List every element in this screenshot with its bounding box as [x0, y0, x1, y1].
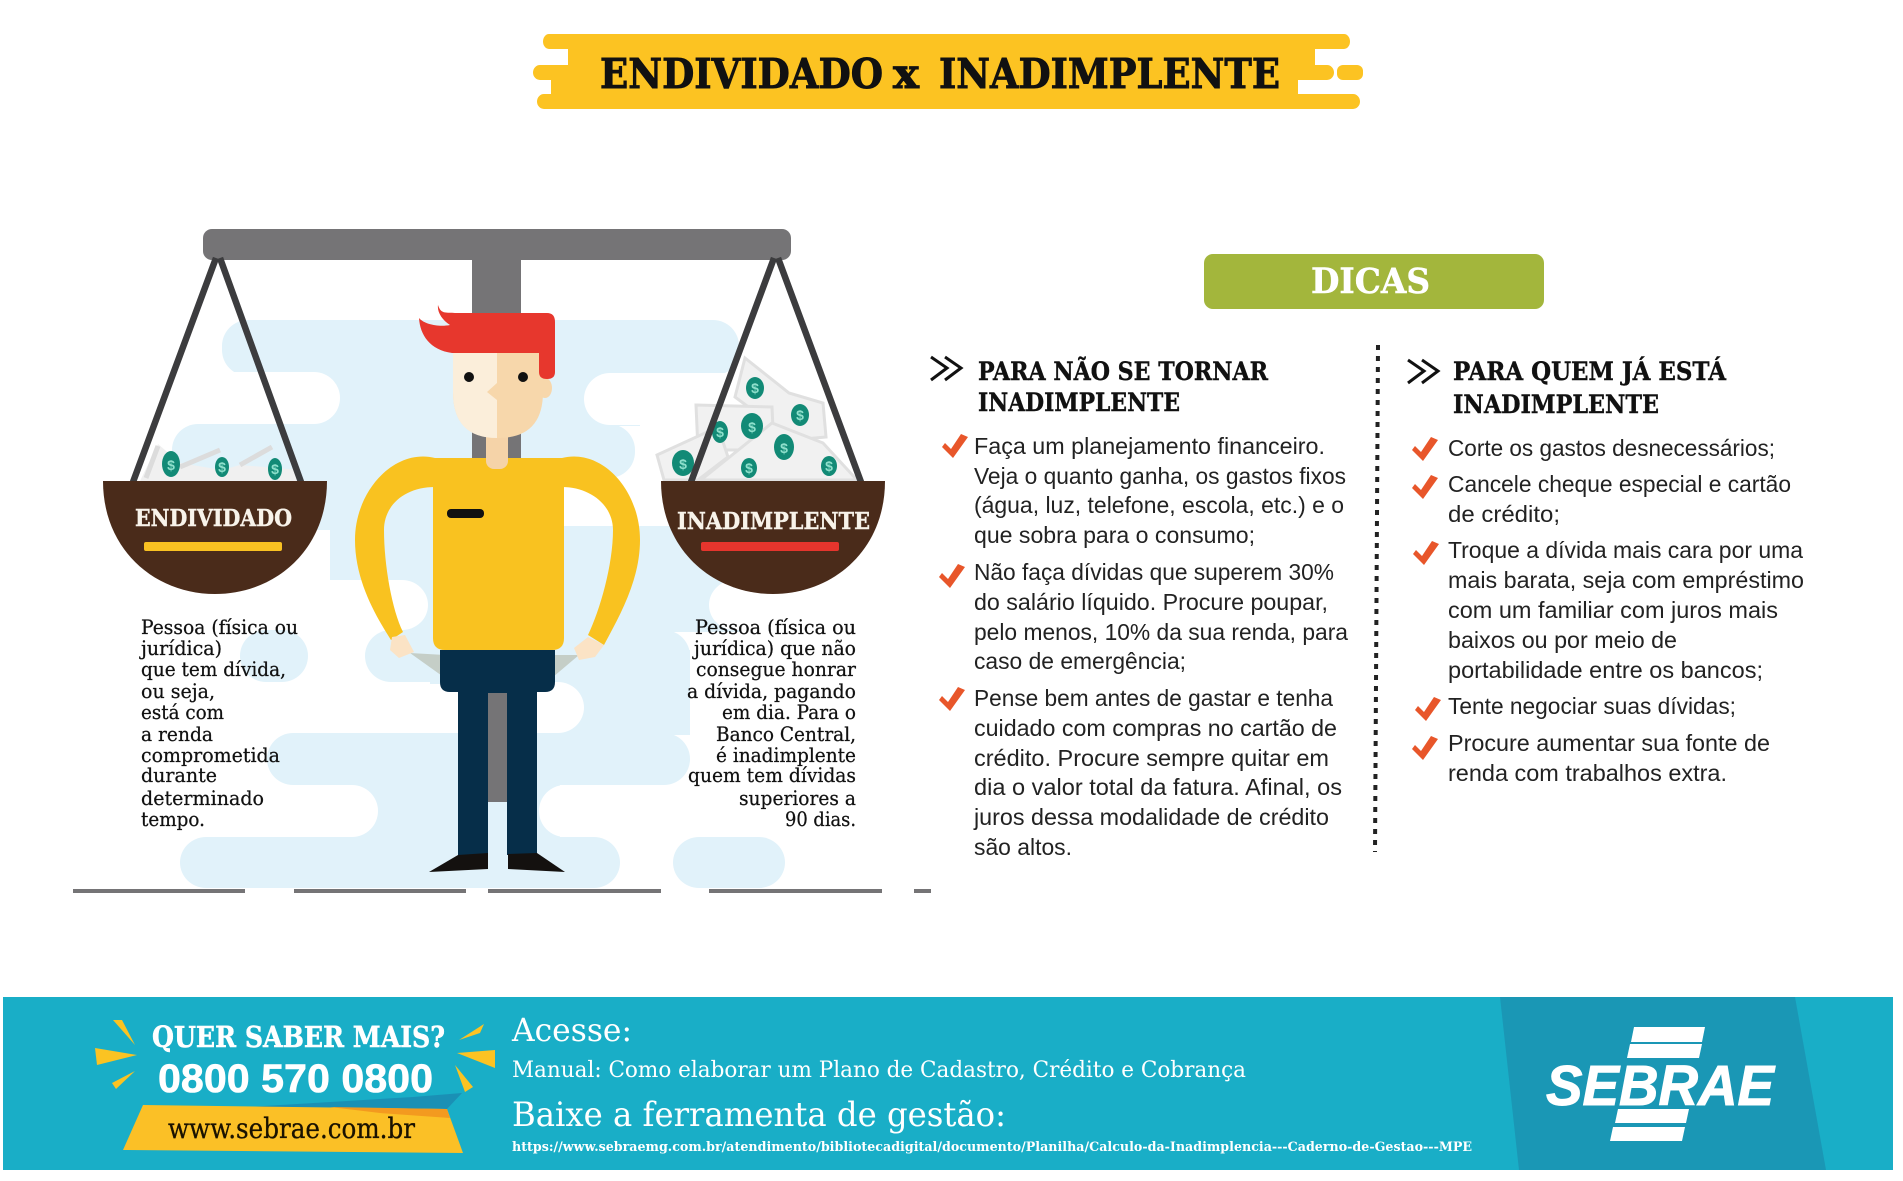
money pile: endividado — [140, 444, 304, 481]
tips text: (água, luz, telefone, escola, etc.) e o — [974, 492, 1344, 518]
neck front — [486, 450, 508, 469]
text: definition inadimplente: em dia. Para o — [722, 701, 856, 724]
ground lines — [73, 889, 931, 893]
tips text: Cancele cheque especial e cartão — [1448, 471, 1791, 497]
coins: $ — [796, 407, 804, 423]
rays — [95, 1020, 495, 1092]
tips text: pelo menos, 10% da sua renda, para — [974, 619, 1348, 645]
column heading: INADIMPLENTE — [1453, 390, 1659, 419]
phone number: 0800 570 0800 — [158, 1057, 433, 1101]
ear — [538, 378, 552, 398]
column heading — [978, 357, 1268, 417]
tips text: Pense bem antes de gastar e tenha — [974, 685, 1333, 711]
pan: inadimplente — [661, 481, 885, 594]
access text: https://www.sebraemg.com.br/atendimento/bibliotecadigital/documento/Planilha/Calculo-da-Inadimplencia---Caderno-de-Gestao---MPE — [512, 1140, 1472, 1155]
icon: double chevron — [1408, 360, 1438, 383]
title text: ENDIVIDADO — [600, 50, 883, 98]
text: definition endividado: durante — [141, 764, 217, 787]
tips text: Veja o quanto ganha, os gastos fixos — [974, 463, 1346, 489]
coins: $ — [745, 460, 753, 476]
tips text: crédito. Procure sempre quitar em — [974, 745, 1329, 771]
tips text: Corte os gastos desnecessários; — [1448, 435, 1775, 461]
text: definition endividado: que tem dívida, — [141, 658, 286, 681]
coins: $ — [679, 456, 687, 472]
column heading: PARA QUEM JÁ ESTÁ — [1453, 357, 1727, 386]
tip checks — [1412, 437, 1441, 760]
scale beam and post — [203, 229, 791, 802]
coins: $ — [271, 461, 279, 477]
text: definition inadimplente: quem tem dívidas — [688, 764, 856, 787]
pan: endividado — [103, 481, 327, 594]
access text: Baixe a ferramenta de gestão: — [512, 1095, 1006, 1135]
access text: Manual: Como elaborar um Plano de Cadastro, Crédito e Cobrança — [512, 1058, 1246, 1083]
hands — [390, 635, 414, 658]
title text — [600, 50, 1280, 98]
dicas label: DICAS — [1311, 261, 1430, 302]
coins: $ — [825, 458, 833, 474]
pan label: ENDIVIDADO — [135, 505, 292, 532]
column: para quem já está inadimplente — [1408, 357, 1804, 786]
tips text: juros dessa modalidade de crédito — [973, 804, 1329, 830]
eyes — [464, 372, 474, 382]
text: definition inadimplente: Banco Central, — [716, 723, 856, 746]
text: definition inadimplente: jurídica) que não — [692, 637, 856, 660]
background cloud shapes — [100, 320, 909, 888]
money pile: inadimplente — [657, 358, 857, 480]
face — [453, 353, 543, 438]
access text: Acesse: — [511, 1011, 632, 1049]
text: definition inadimplente: a dívida, pagando — [687, 680, 856, 703]
coins: $ — [218, 459, 226, 475]
tips text: caso de emergência; — [974, 648, 1186, 674]
tip checks — [939, 434, 968, 711]
text: definition endividado: Pessoa (física ou — [141, 616, 298, 639]
text: definition endividado: comprometida — [141, 744, 280, 767]
coins: $ — [751, 380, 759, 396]
tips text: com um familiar com juros mais — [1448, 597, 1778, 623]
tips text: Troque a dívida mais cara por uma — [1448, 537, 1803, 563]
text: definition endividado: determinado — [141, 787, 264, 810]
contact heading: QUER SABER MAIS? — [152, 1020, 445, 1054]
yellow bar — [144, 542, 282, 551]
column: para não se tornar inadimplente — [931, 357, 1348, 860]
tips text: cuidado com compras no cartão de — [974, 715, 1337, 741]
dotted divider — [1375, 345, 1378, 852]
column heading: INADIMPLENTE — [978, 388, 1180, 417]
ribbon — [123, 1093, 463, 1153]
title text: INADIMPLENTE — [939, 50, 1280, 98]
logo panel — [1500, 997, 1826, 1170]
tips text: Procure aumentar sua fonte de — [1448, 730, 1770, 756]
person — [355, 305, 640, 872]
badge — [447, 509, 484, 518]
coins — [162, 451, 282, 480]
hair — [419, 305, 555, 379]
text: definition endividado: ou seja, — [141, 680, 215, 703]
shirt — [433, 458, 564, 650]
tips text: Faça um planejamento financeiro. — [974, 433, 1325, 459]
column heading — [1453, 357, 1727, 419]
text: definition endividado: está com — [141, 701, 224, 724]
tips text: dia o valor total da fatura. Afinal, os — [974, 774, 1342, 800]
text: definition inadimplente: superiores a — [739, 787, 856, 810]
sebrae logo: SEBRAE — [1546, 1054, 1776, 1118]
tips text — [973, 433, 1348, 860]
text: definition endividado — [139, 616, 298, 831]
text: definition inadimplente: consegue honrar — [696, 658, 857, 681]
sebrae logo — [1546, 1027, 1776, 1141]
text: definition endividado: a renda — [141, 723, 213, 746]
website: www.sebrae.com.br — [168, 1112, 416, 1145]
column heading: PARA NÃO SE TORNAR — [978, 357, 1268, 386]
coins: $ — [748, 419, 756, 435]
dicas heading — [1204, 254, 1544, 309]
pan label: INADIMPLENTE — [677, 508, 870, 535]
icon: double chevron — [931, 357, 961, 380]
tips text: mais barata, seja com empréstimo — [1448, 567, 1804, 593]
text: definition endividado: jurídica) — [139, 637, 222, 660]
text: definition inadimplente: 90 dias. — [785, 808, 856, 831]
coins: $ — [167, 457, 175, 473]
tips text: que sobra para o consumo; — [974, 522, 1255, 548]
trousers — [440, 650, 555, 855]
access text — [511, 1011, 1472, 1155]
coins: $ — [716, 424, 724, 440]
tips text: baixos ou por meio de — [1448, 627, 1677, 653]
coins — [672, 377, 837, 478]
text: definition inadimplente — [687, 616, 857, 831]
tips text: Tente negociar suas dívidas; — [1448, 693, 1736, 719]
shoes — [429, 853, 488, 872]
coins: $ — [780, 440, 788, 456]
text: definition inadimplente: é inadimplente — [716, 744, 856, 767]
tips text: são altos. — [974, 834, 1072, 860]
tips text: de crédito; — [1448, 501, 1560, 527]
pocket linings — [410, 653, 445, 678]
tips text: Não faça dívidas que superem 30% — [974, 559, 1334, 585]
red bar — [701, 542, 839, 551]
tips text: portabilidade entre os bancos; — [1448, 657, 1763, 683]
scale strings — [133, 258, 861, 482]
arms — [562, 457, 640, 645]
title banner — [533, 34, 1363, 109]
neck — [486, 425, 508, 469]
tips text — [1448, 435, 1804, 786]
call-to-action — [95, 1020, 495, 1153]
text: definition inadimplente: Pessoa (física ou — [695, 616, 856, 639]
footer banner — [3, 997, 1893, 1170]
title text: x — [893, 50, 920, 98]
tips text: do salário líquido. Procure poupar, — [974, 589, 1328, 615]
text: definition endividado: tempo. — [141, 808, 205, 831]
tips text: renda com trabalhos extra. — [1448, 760, 1727, 786]
